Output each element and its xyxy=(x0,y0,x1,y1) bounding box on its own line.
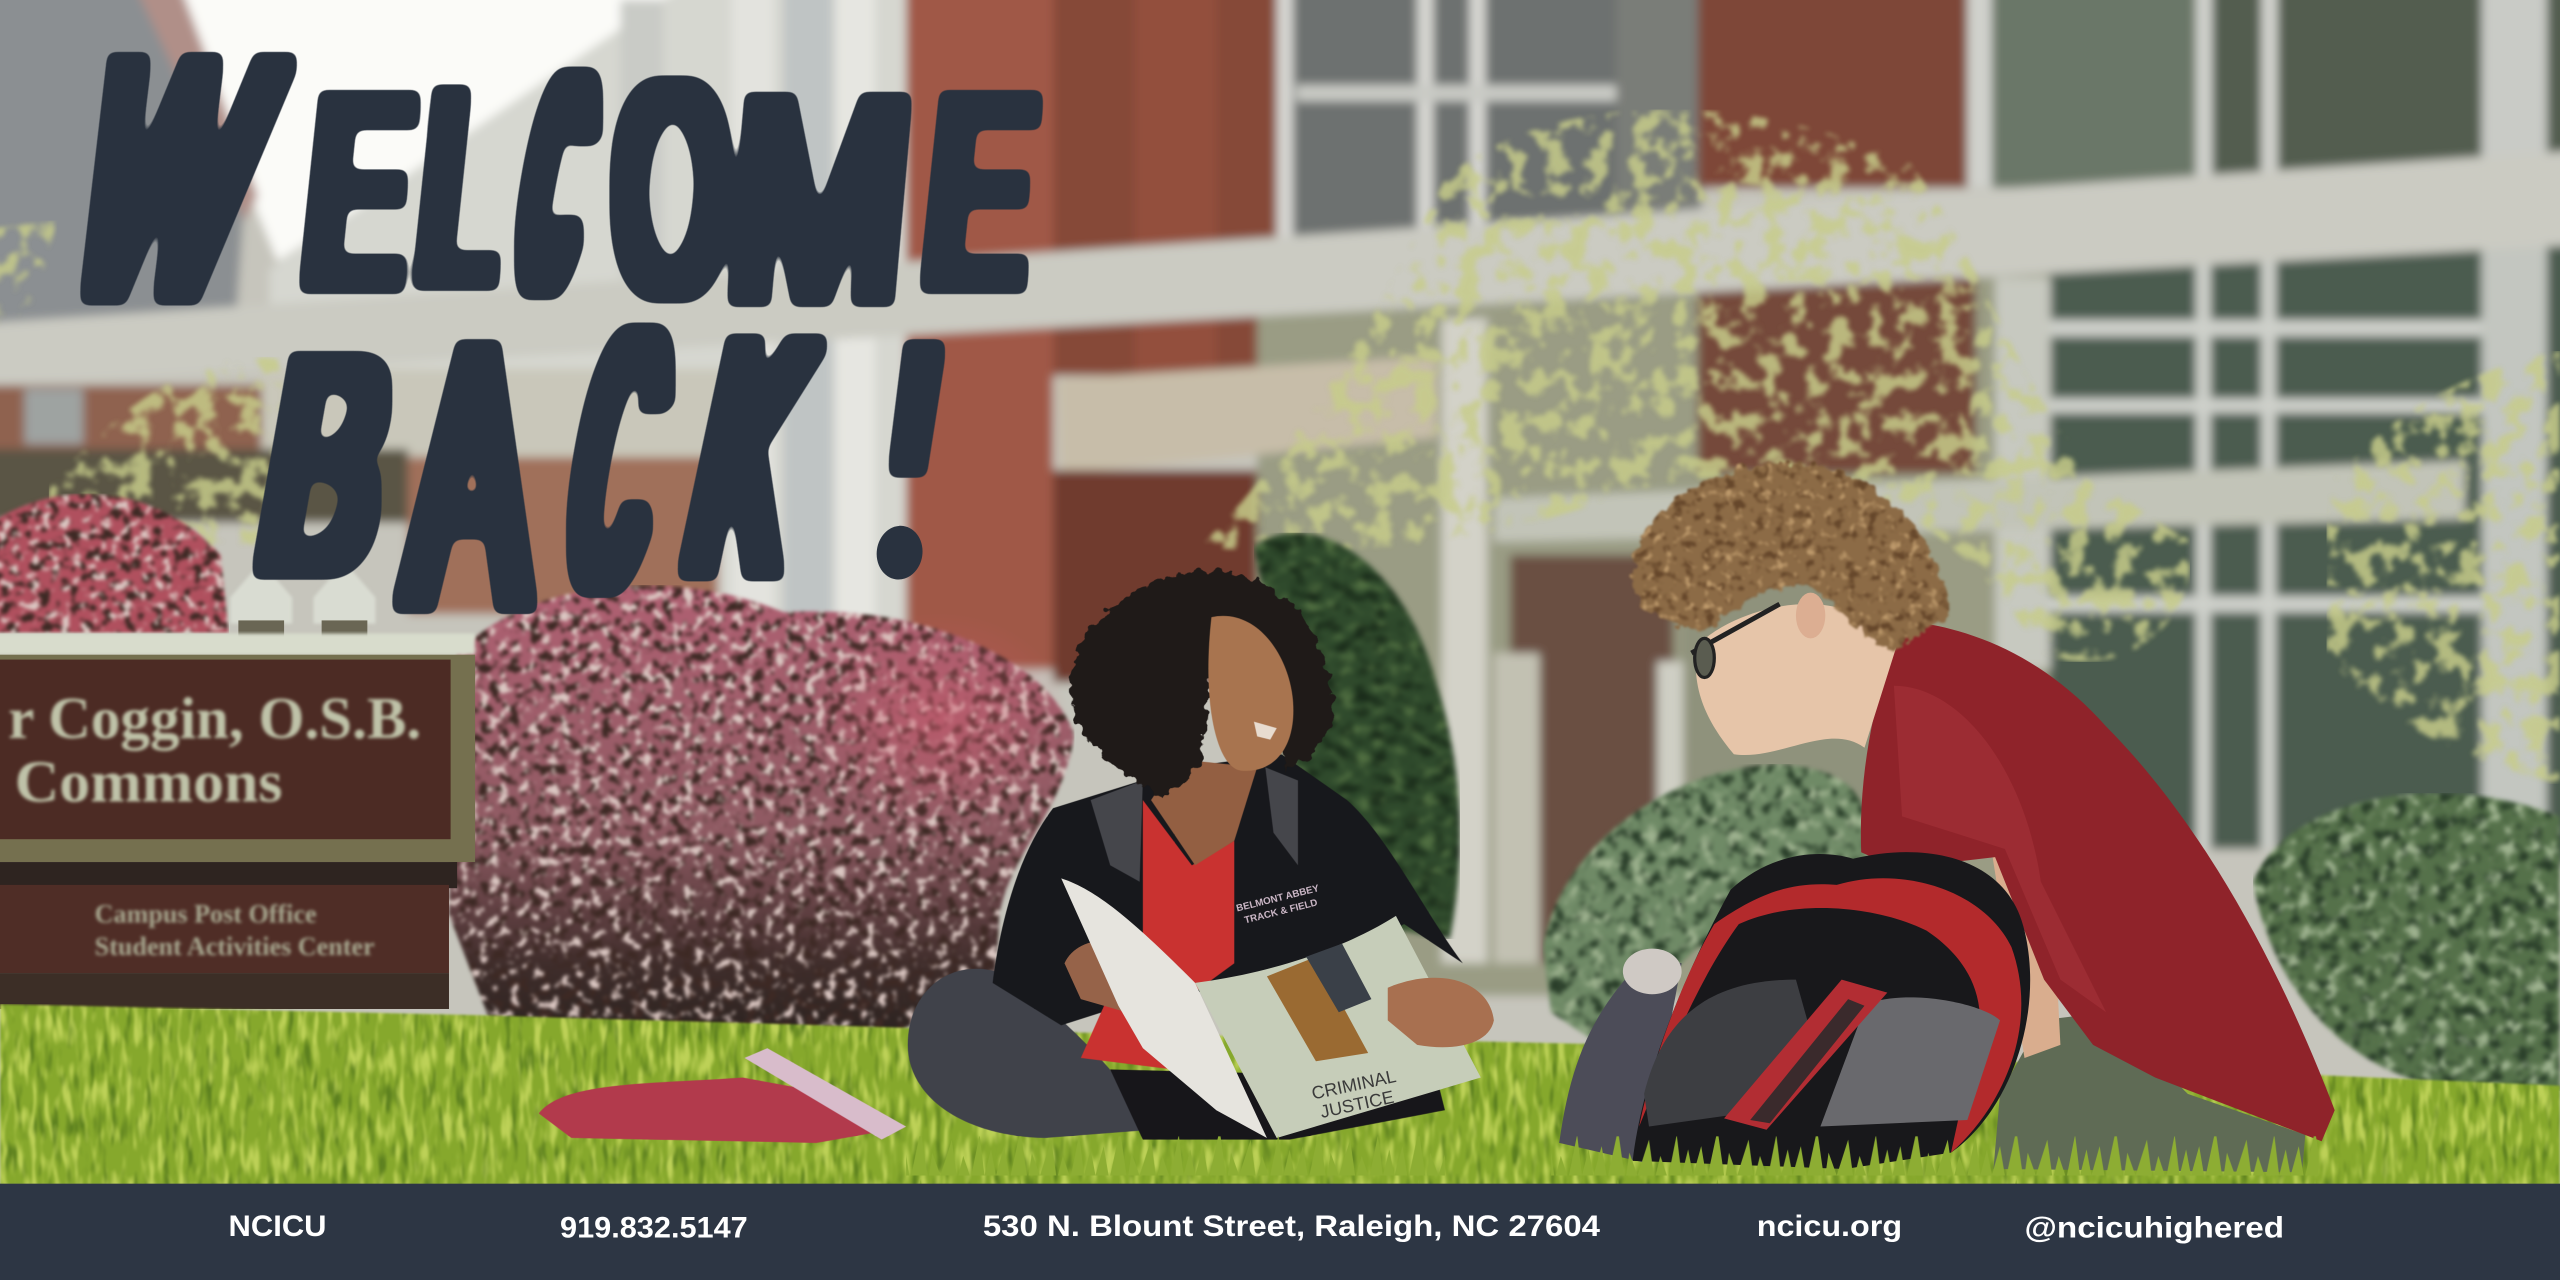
background shrubs: dark cypress and green bushes xyxy=(1254,533,2560,1091)
title: Welcome Back!: E xyxy=(294,41,423,341)
title: Welcome Back!: K xyxy=(664,271,837,642)
footer bar: contact details xyxy=(0,1184,2560,1280)
title: Welcome Back!: A xyxy=(401,268,543,683)
background foliage: pale vines over the trellis xyxy=(0,110,2560,784)
campus sign: Coggin Commons: Campus Post Office xyxy=(95,899,317,928)
title: Welcome Back!: C xyxy=(501,15,613,352)
title: Welcome Back!: E xyxy=(915,43,1045,342)
title: Welcome Back!: O xyxy=(613,26,730,354)
student: woman reading a book: TRACK & FIELD xyxy=(1243,897,1319,926)
grass lawn xyxy=(0,1004,2560,1185)
campus sign: Coggin Commons: Commons xyxy=(15,750,282,815)
student: woman reading a book: BELMONT ABBEY xyxy=(1235,883,1321,914)
title: Welcome Back!: ! xyxy=(871,297,954,565)
campus sign: Coggin Commons xyxy=(0,562,475,1009)
title: Welcome Back!: M xyxy=(718,41,921,358)
title: Welcome Back!: B xyxy=(240,295,414,634)
footer: social handle: @ncicuhighered xyxy=(2024,1212,2284,1245)
student: woman reading a book xyxy=(908,571,1494,1140)
student: woman reading a book: CRIMINAL xyxy=(1310,1066,1398,1103)
title: Welcome Back!: C xyxy=(547,258,691,661)
title: Welcome Back! xyxy=(80,52,1044,614)
campus sign: Coggin Commons: Student Activities Center xyxy=(95,932,375,961)
footer: website: ncicu.org xyxy=(1757,1210,1902,1243)
footer: phone number: 919.832.5147 xyxy=(560,1212,748,1245)
student: woman reading a book: JUSTICE xyxy=(1318,1087,1396,1122)
campus sign: Coggin Commons: r Coggin, O.S.B. xyxy=(8,686,421,751)
flowering azalea bushes xyxy=(0,494,1074,1032)
footer: organisation name: NCICU xyxy=(229,1210,327,1243)
foreground grass tufts xyxy=(906,1136,2318,1185)
student: man with curly hair in red shirt xyxy=(1633,464,2335,1172)
footer: street address: 530 N. Blount Street, Raleigh, NC 27604 xyxy=(983,1210,1601,1243)
backpack on the grass xyxy=(1559,852,2030,1169)
title: Welcome Back!: L xyxy=(409,35,516,339)
red bag and papers on the grass xyxy=(539,1048,906,1143)
